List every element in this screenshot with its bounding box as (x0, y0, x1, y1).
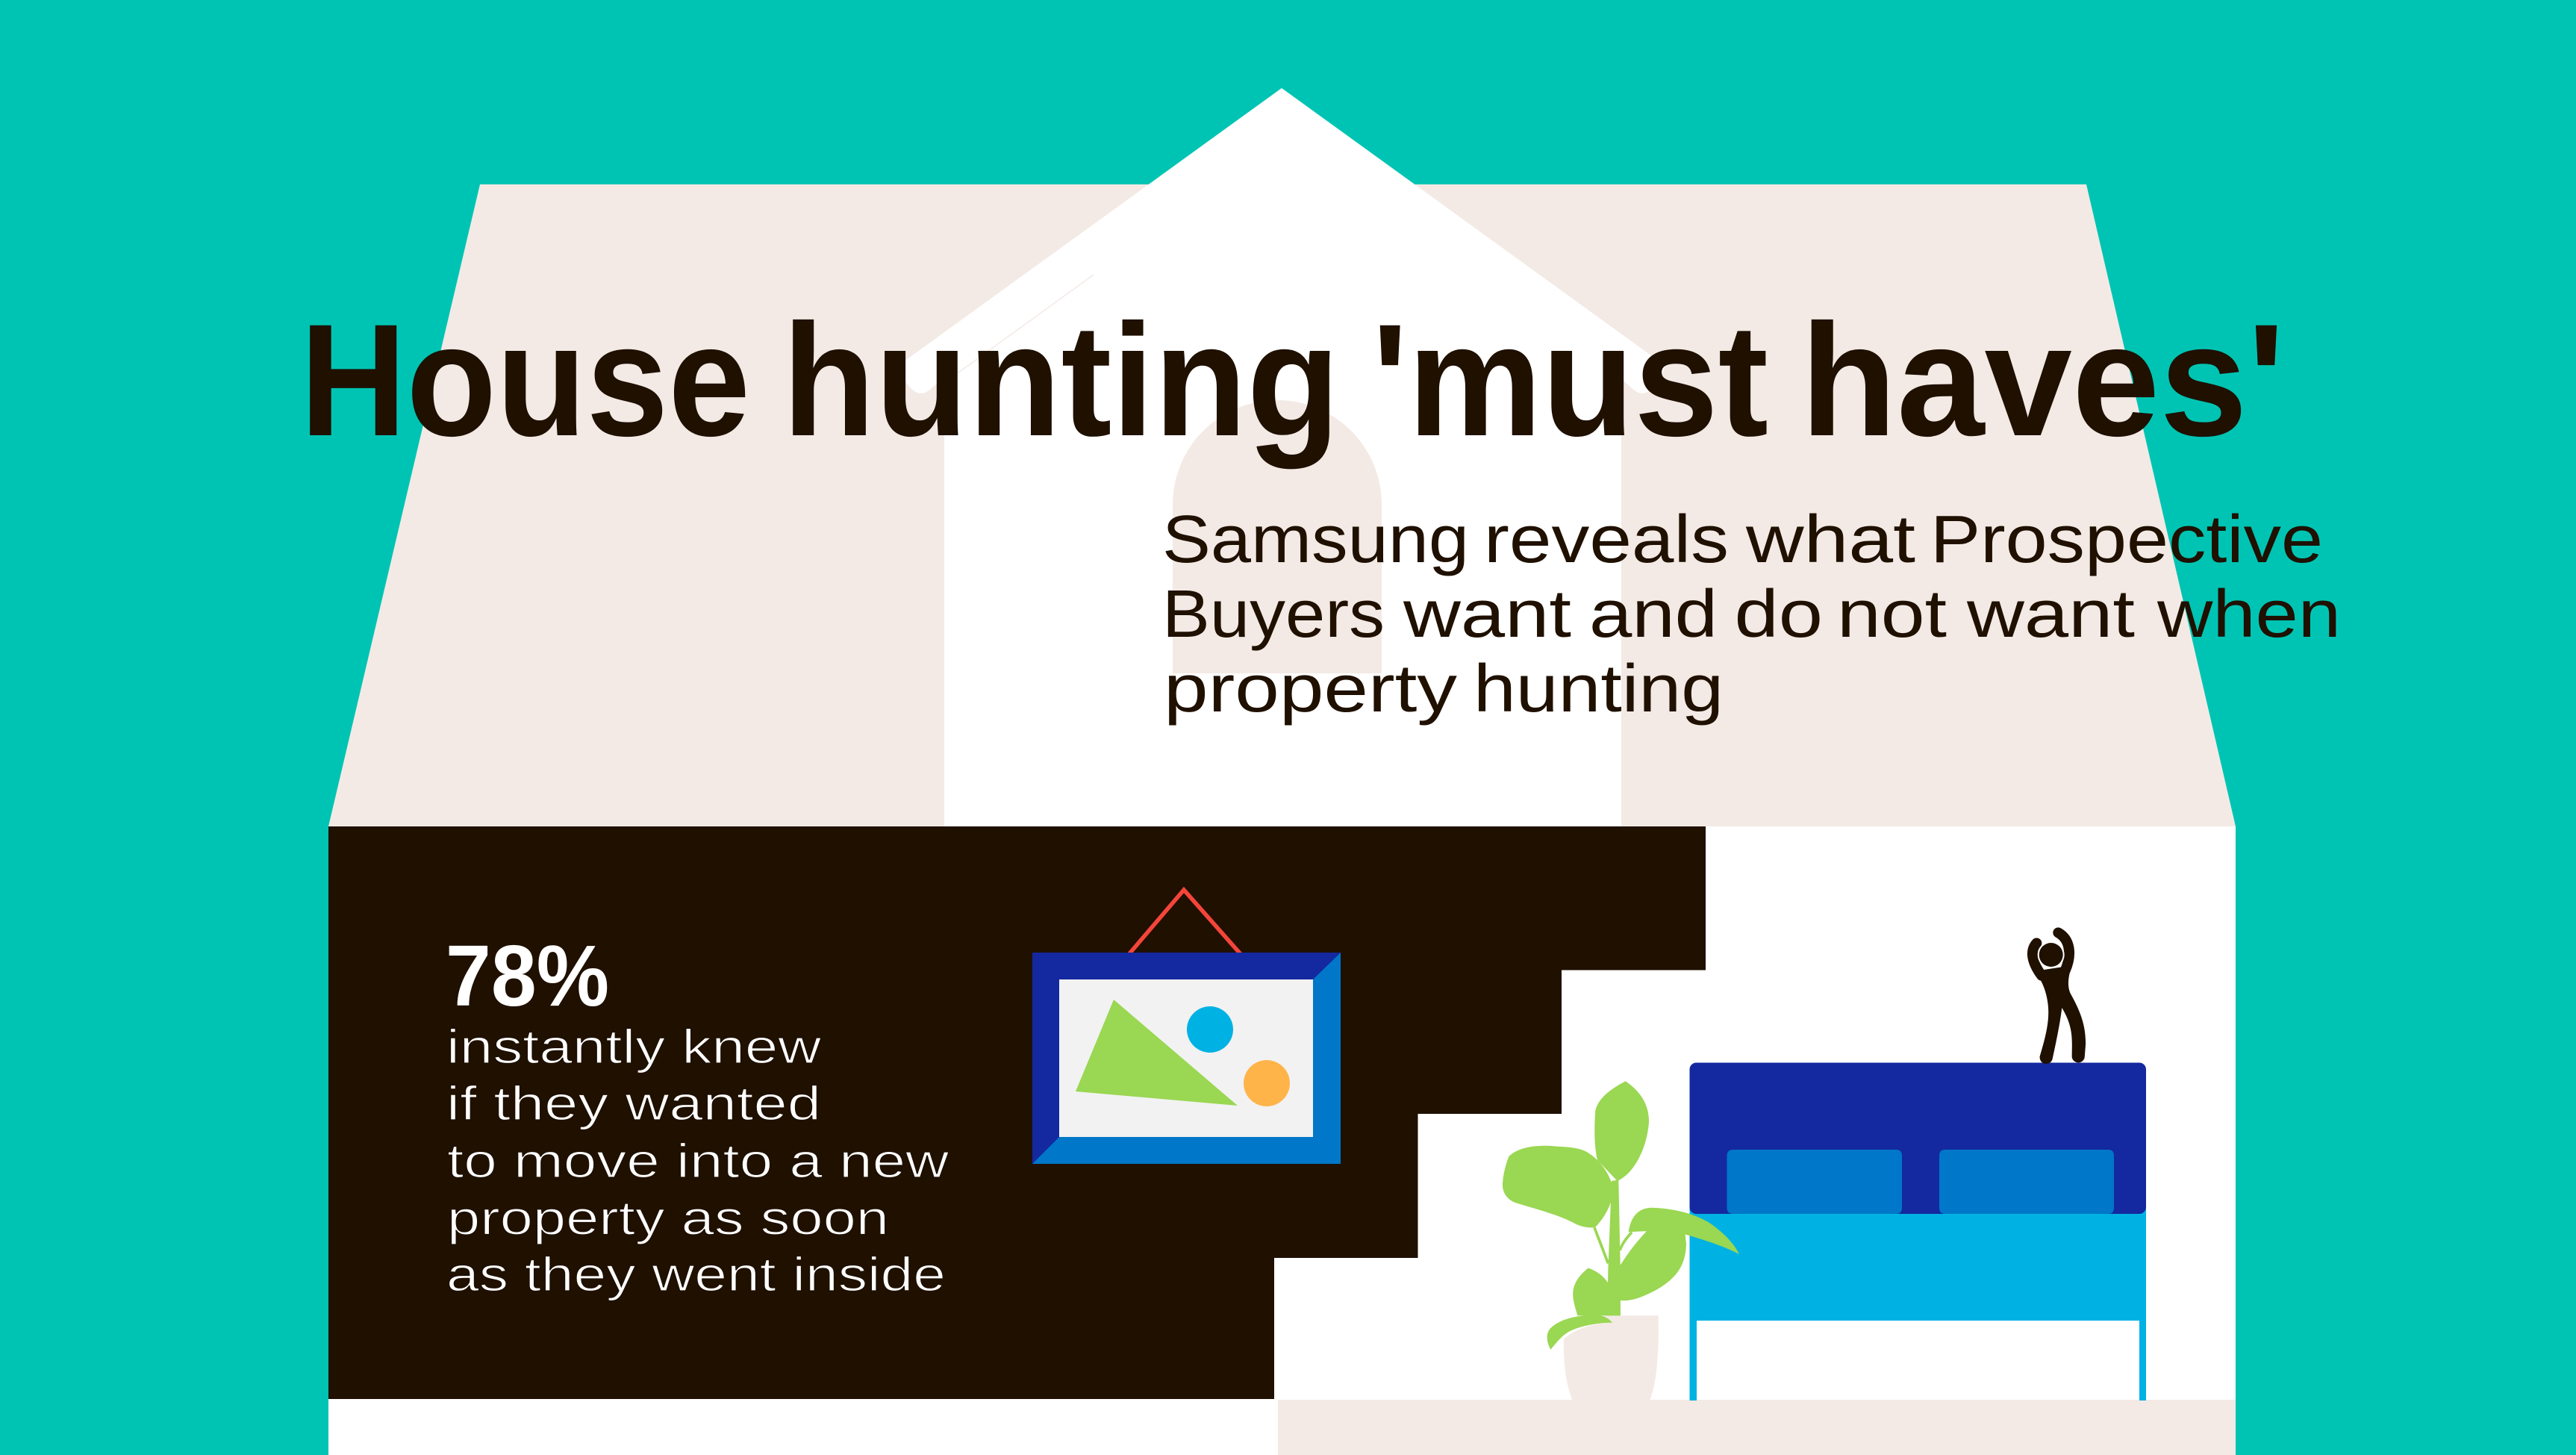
frame hanger (1129, 890, 1241, 954)
stem (1607, 1180, 1621, 1315)
subtitle: Buyers (1162, 577, 1385, 652)
description line 5: as they went inside (446, 1247, 946, 1301)
gable and white front wall (898, 88, 1665, 826)
plant (1503, 1081, 1739, 1401)
small lower leaf (1573, 1268, 1620, 1315)
subtitle: Samsung (1162, 502, 1469, 577)
frame right and bottom (1032, 953, 1341, 1164)
subtitle: and (1589, 577, 1718, 652)
title: hunting (782, 291, 1340, 470)
blue circle (1187, 1006, 1233, 1053)
arched window (1173, 400, 1382, 673)
house illustration (328, 88, 2236, 1455)
left pillow (1727, 1150, 1902, 1214)
subtitle (1162, 502, 2341, 726)
title: House (300, 291, 750, 470)
dark staircase wall (328, 826, 1706, 1399)
roof (328, 184, 2236, 826)
subtitle: want (1966, 577, 2135, 652)
subtitle: reveals (1484, 502, 1729, 577)
arms (2033, 932, 2069, 976)
subtitle: when (2156, 577, 2341, 652)
description line 2: if they wanted (446, 1077, 821, 1130)
hanging leaf (1547, 1315, 1612, 1350)
upper right leaf (1629, 1208, 1739, 1254)
right pillow (1939, 1150, 2114, 1214)
head outline (2038, 941, 2065, 968)
icon: person stretching (2033, 932, 2086, 1064)
mattress and legs (1690, 1194, 2146, 1401)
statistic number: 78% (446, 927, 609, 1024)
picture frame (1032, 890, 1341, 1164)
green triangle (1076, 1000, 1238, 1106)
subtitle: what (1745, 502, 1915, 577)
left leaf (1503, 1146, 1614, 1227)
description line 3: to move into a new (447, 1134, 949, 1188)
frame top and left (1032, 953, 1341, 1164)
statistic description (446, 1020, 949, 1301)
subtitle: property (1164, 652, 1457, 726)
house body (328, 826, 2236, 1455)
canvas (1059, 979, 1313, 1137)
subtitle: do (1735, 577, 1823, 652)
title: haves' (1800, 291, 2285, 470)
title (300, 291, 2285, 470)
top leaf (1594, 1081, 1649, 1181)
floor (1278, 1400, 2236, 1455)
subtitle: not (1837, 577, 1947, 652)
side branches (1594, 1227, 1632, 1263)
subtitle: hunting (1473, 652, 1724, 726)
body and legs (2039, 965, 2086, 1064)
description line 4: property as soon (447, 1191, 889, 1245)
orange circle (1244, 1060, 1290, 1106)
description line 1: instantly knew (446, 1020, 822, 1074)
subtitle: Prospective (1930, 502, 2323, 577)
gable trim line (942, 275, 1094, 384)
bed (1690, 1063, 2146, 1401)
title: 'must (1372, 291, 1768, 470)
pot (1564, 1315, 1659, 1401)
subtitle: want (1403, 577, 1571, 652)
head (2039, 943, 2063, 967)
plant leaves and stem (1503, 1081, 1739, 1350)
statistic callout (446, 927, 949, 1301)
headboard (1690, 1063, 2146, 1214)
lower right leaf (1618, 1228, 1686, 1300)
